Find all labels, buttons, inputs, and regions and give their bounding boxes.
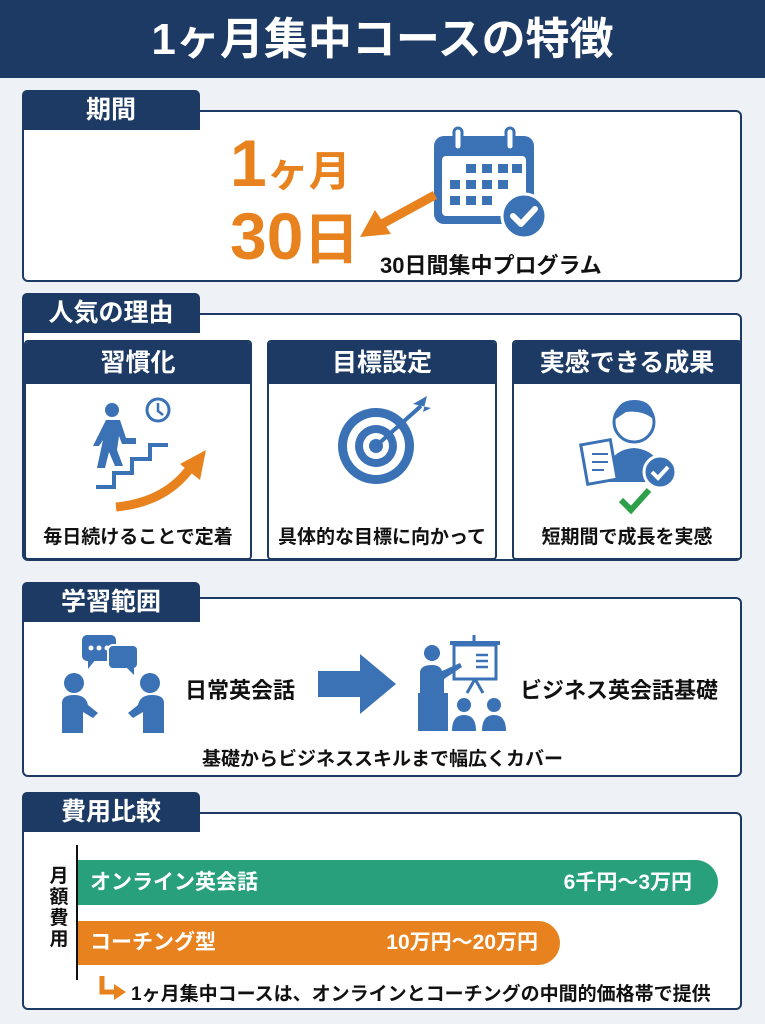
axis label: 月額費用 — [49, 866, 68, 950]
panel: cost — [22, 812, 742, 1010]
text: business: ビジネス英会話基礎 — [520, 678, 718, 703]
tab: reasons: 人気の理由 — [48, 299, 174, 327]
card: goal: 具体的な目標に向かって — [278, 527, 486, 548]
card: goal: 目標設定 — [332, 349, 432, 377]
card: habit: 毎日続けることで定着 — [43, 527, 233, 548]
note: 1ヶ月集中コースは、オンラインとコーチングの中間的価格帯で提供 — [131, 984, 711, 1005]
tab: cost: 費用比較 — [61, 798, 161, 826]
tab: cost — [22, 792, 200, 832]
icon: stairs — [93, 398, 206, 512]
panel: scope — [22, 597, 742, 777]
panel: reasons — [22, 313, 742, 561]
card: result: 実感できる成果 — [540, 349, 714, 377]
bar: online: オンライン英会話 — [90, 871, 258, 894]
icon: calendar — [434, 126, 544, 236]
bar: coaching: コーチング型 — [90, 931, 216, 954]
tab: period — [22, 90, 200, 130]
axis line — [76, 845, 78, 980]
text: program: 30日間集中プログラム — [380, 253, 602, 278]
card: habit: 習慣化 — [100, 349, 176, 377]
arrow: calendar to 30日 — [360, 191, 438, 237]
card: habit — [24, 340, 252, 560]
bar: online: 6千円～3万円 — [564, 871, 692, 894]
icon: person with check — [579, 400, 674, 514]
icon: presenter — [418, 635, 506, 731]
caption: scope: 基礎からビジネススキルまで幅広くカバー — [202, 749, 563, 770]
icon: note arrow — [100, 976, 126, 1000]
card: result: 短期間で成長を実感 — [541, 527, 712, 548]
tab: period: 期間 — [86, 96, 136, 124]
panel: period — [22, 110, 742, 282]
icon: conversation — [62, 635, 164, 733]
bar: coaching: 10万円～20万円 — [386, 931, 538, 954]
card: goal — [267, 340, 497, 560]
text: 30日: 30日 — [230, 199, 359, 273]
card: result — [512, 340, 742, 560]
bar: online — [78, 860, 718, 905]
title: 1ヶ月集中コースの特徴 — [151, 15, 614, 64]
text: daily conversation: 日常英会話 — [185, 678, 295, 703]
title — [0, 0, 765, 78]
bar: coaching — [78, 921, 560, 965]
tab: reasons — [22, 293, 200, 333]
tab: scope — [22, 582, 200, 622]
arrow: right — [318, 654, 396, 714]
text: 1ヶ月: 1ヶ月 — [230, 126, 351, 200]
icon: target — [338, 396, 431, 484]
tab: scope: 学習範囲 — [61, 588, 161, 616]
